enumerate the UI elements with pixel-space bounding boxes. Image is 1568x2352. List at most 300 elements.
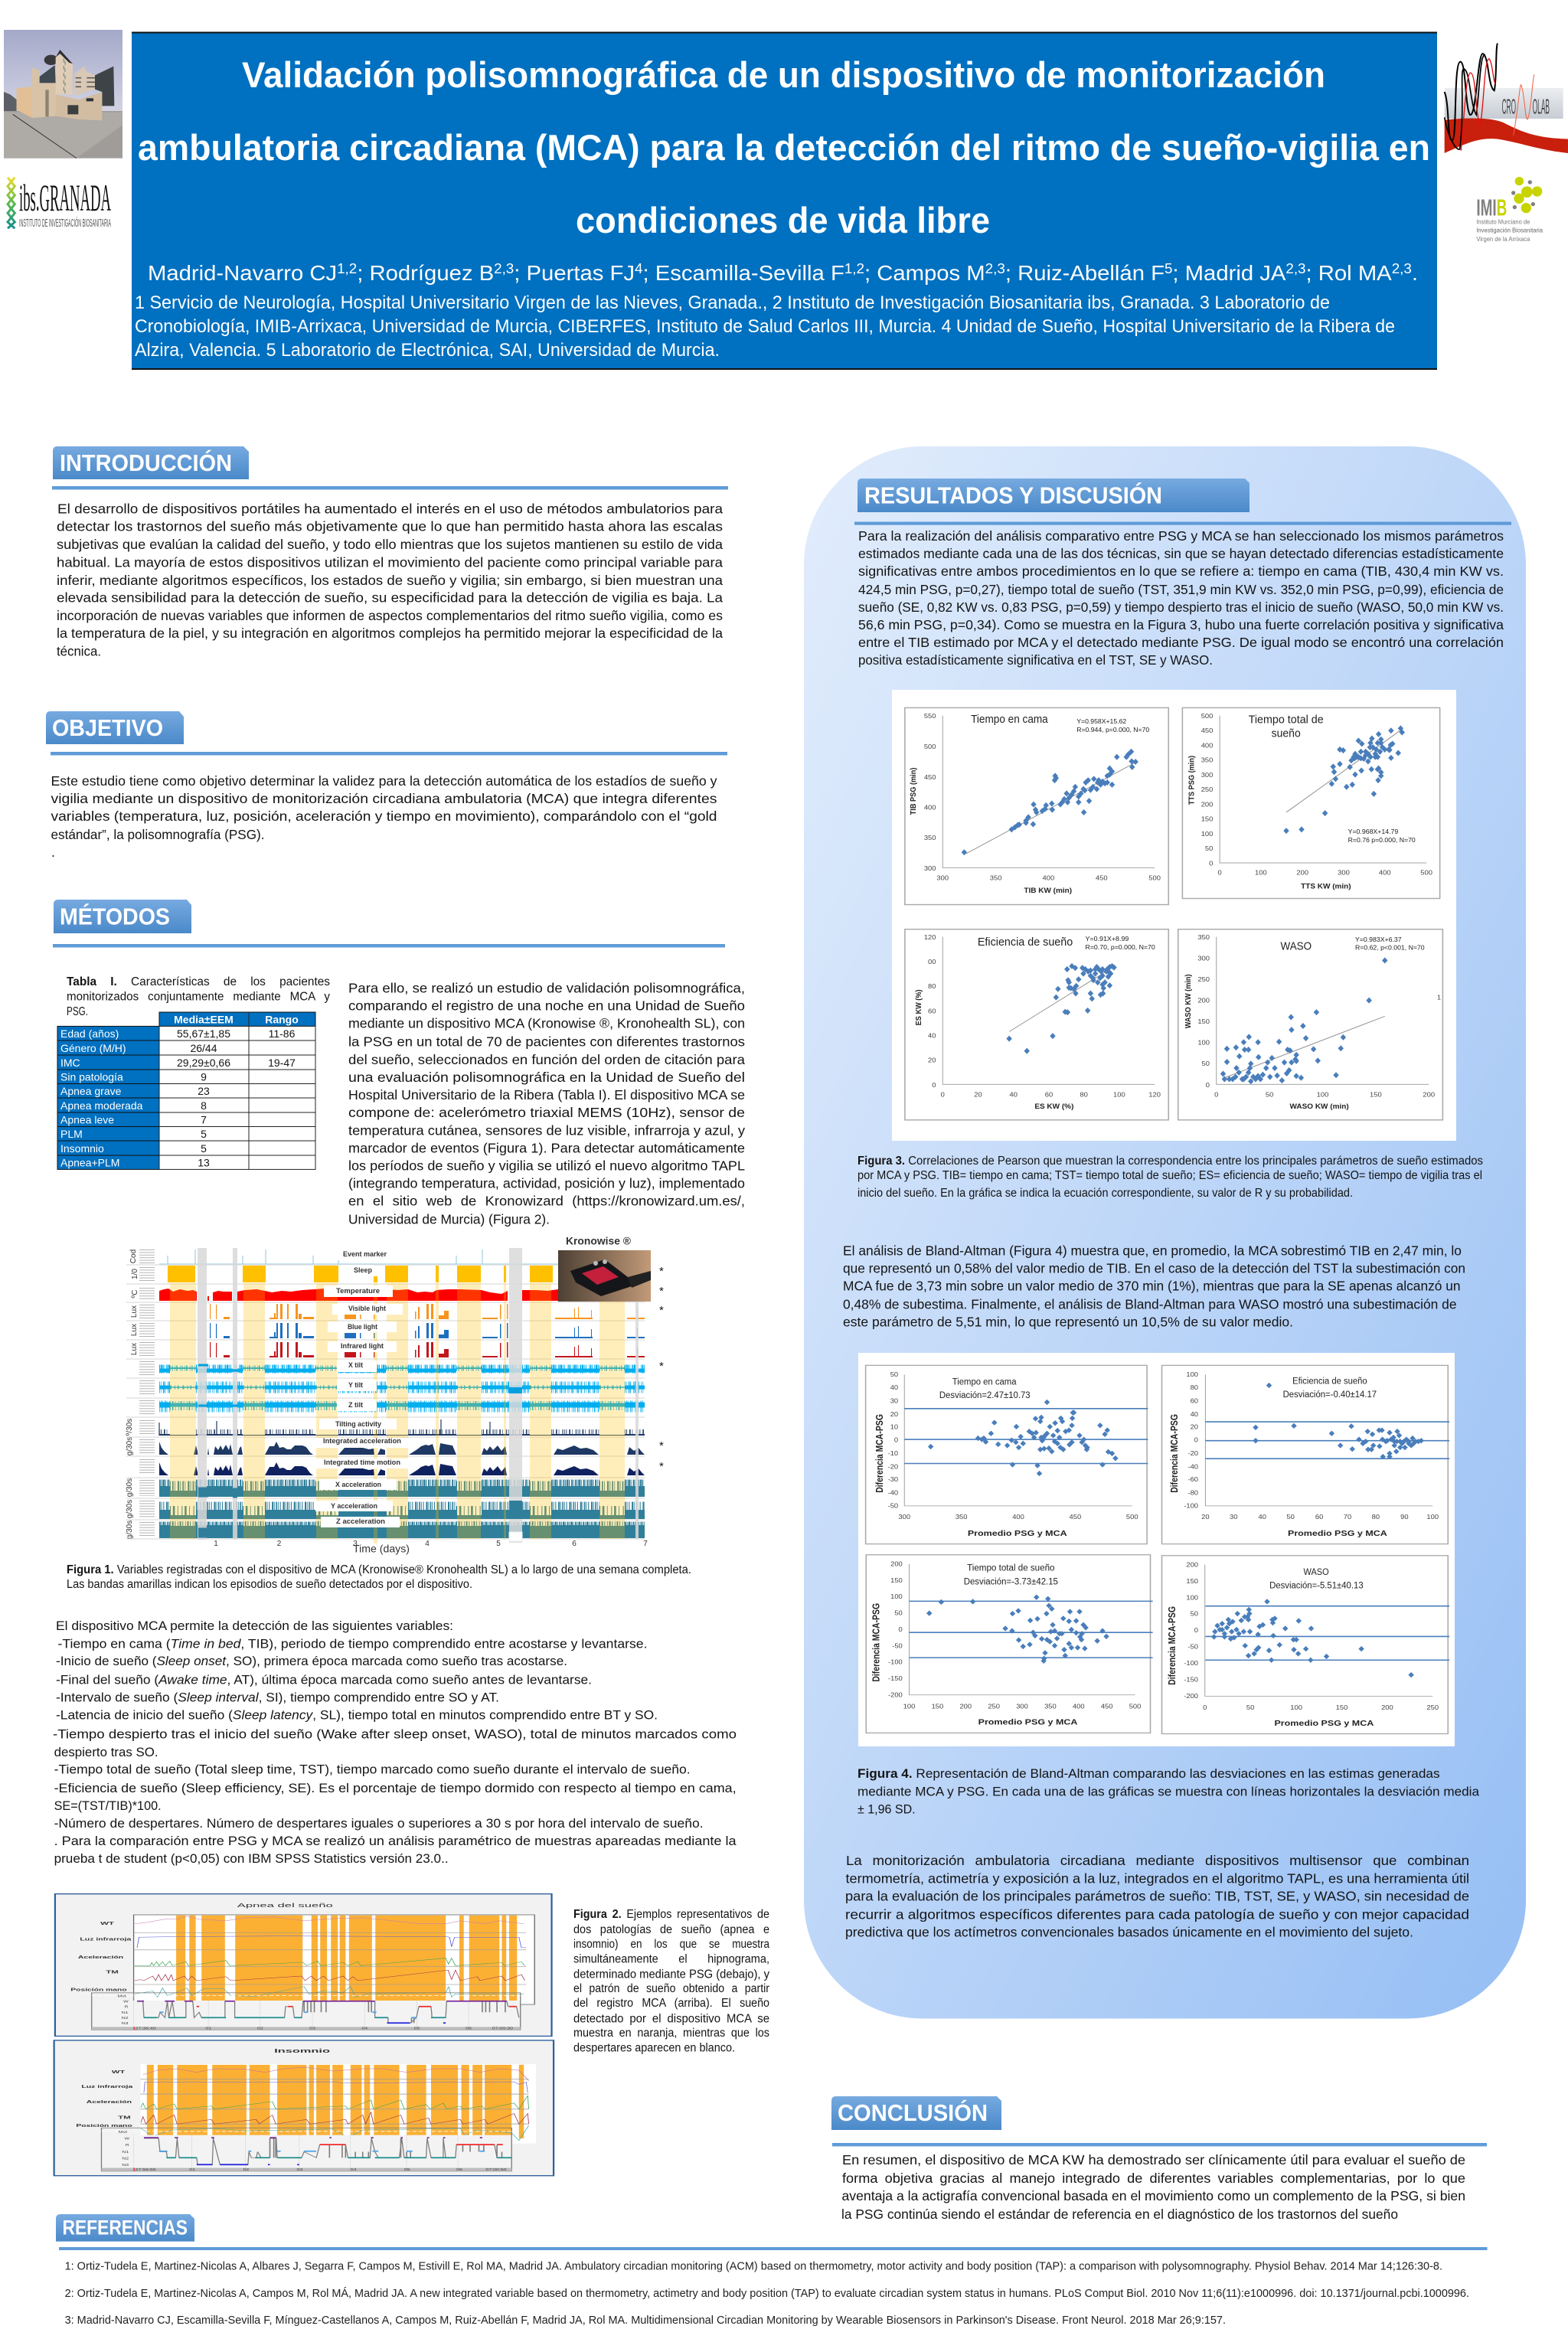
chart: WASO: 150 <box>1197 1018 1210 1025</box>
text: results paragraph: sueño (SE, 0,82 KW vs. 0,83 PSG, p=0,59) y tiempo despierto tras el inicio de sueño (WASO, 50,0 min KW vs. <box>858 599 1504 615</box>
text: objetivo: vigilia mediante un dispositivo de monitorización circadiana ambulatoria (MCA) que integra diferentes <box>51 791 717 806</box>
figure 2 caption: el patrón de sueño obtenido a partir <box>573 1982 769 1995</box>
chart: eficiencia de sueño: Eficiencia de sueño <box>978 936 1073 949</box>
table: patient characteristics: Rango <box>265 1014 299 1026</box>
panel labels: N2 <box>122 2158 129 2161</box>
text: conclusión: aventaja a la actigrafía convencional basada en el movimiento como un complemento de la PSG, si bien <box>842 2188 1465 2203</box>
text: métodos study description: la PSG en un total de 70 de pacientes con diferentes trastornos <box>348 1034 745 1050</box>
panel labels: 02 <box>257 2027 263 2030</box>
chart: Bland-Altman eficiencia de sueño: 20 <box>1191 1423 1198 1430</box>
chart: tiempo en cama: 400 <box>1043 874 1054 881</box>
chart: tiempo en cama: 300 <box>936 874 949 881</box>
chart: WASO: WASO KW (min) <box>1184 974 1193 1028</box>
chart: eficiencia de sueño: 60 <box>928 1008 936 1014</box>
logo: IMIB <box>1476 177 1544 243</box>
row: axis units: ºC <box>131 1290 139 1298</box>
heading: referencias: REFERENCIAS <box>63 2216 188 2239</box>
authors: 4 <box>635 261 642 276</box>
panel labels: W <box>123 2000 129 2004</box>
panel labels: R <box>126 2144 129 2148</box>
heading: resultados y discusión: RESULTADOS Y DISCUSIÓN <box>864 481 1162 508</box>
authors: 5 <box>1165 261 1172 276</box>
chart: eficiencia de sueño: R=0.70, p=0.000, N=70 <box>1086 943 1155 951</box>
chart: tiempo total de sueño: 300 <box>1201 771 1213 779</box>
chart: Bland-Altman eficiencia de sueño: Promedio PSG y MCA <box>1288 1530 1388 1538</box>
row labels: Infrared light <box>341 1342 384 1350</box>
text: introducción <box>57 501 723 659</box>
chart: Bland-Altman eficiencia de sueño: 40 <box>1191 1411 1198 1418</box>
row: axis units: Lux <box>130 1324 139 1336</box>
text: variables list: -Eficiencia de sueño (Sleep efficiency, SE). Es el porcentaje de tiempo dormido con respecto al tiempo en cama, <box>54 1782 737 1795</box>
chart: Bland-Altman tiempo total de sueño: 450 <box>1101 1703 1113 1710</box>
chart: WASO: WASO KW (min) <box>1290 1102 1349 1111</box>
text: variables list: -Latencia de inicio del sueño ( Sleep latency , SL), tiempo total en minutos comprendido entre BT y SO. <box>56 1708 658 1722</box>
panel labels: N3 <box>122 2164 129 2167</box>
figure 3 caption: Figura 3. Correlaciones de Pearson que muestran la correspondencia entre los principales parámetros de sueño estimados <box>858 1155 1483 1168</box>
text: métodos study description: Hospital Universitario de la Ribera (Tabla I). El dispositivo MCA se <box>348 1087 745 1102</box>
chart: Bland-Altman tiempo total de sueño: 150 <box>890 1577 903 1584</box>
chart: tiempo total de sueño: Tiempo total de <box>1249 714 1324 726</box>
chart: tiempo en cama: 500 <box>1148 874 1161 881</box>
heading: métodos <box>53 900 725 948</box>
chart: Bland-Altman eficiencia de sueño: 90 <box>1400 1514 1409 1521</box>
heading: conclusión <box>831 2096 1487 2146</box>
chart: Bland-Altman WASO: WASO <box>1303 1567 1329 1577</box>
figure 4 caption: mediante MCA y PSG. En cada una de las gráficas se muestra con líneas horizontales la desviación media <box>858 1785 1480 1799</box>
text: results paragraph: estimados mediante cada una de las dos técnicas, sin que se hayan detectado diferencias estadísticamente <box>858 546 1504 561</box>
text: discussion paragraph: para la evaluación de los principales parámetros de sueño: TIB, TST, SE, y WASO, sin necesidad de <box>845 1888 1469 1903</box>
chart: tiempo total de sueño: 400 <box>1379 869 1391 876</box>
text: conclusión <box>841 2152 1465 2222</box>
chart: eficiencia de sueño: 120 <box>924 933 936 941</box>
figure 1 caption: Figura 1. Variables registradas con el dispositivo de MCA (Kronowise® Kronohealth SL) a lo largo de una semana completa. <box>67 1563 691 1576</box>
text: métodos study description: del sueño, seleccionados en función del orden de citación para <box>348 1052 745 1067</box>
text: results paragraph: entre el TIB estimado por MCA y el detectado mediante PSG. De igual modo se encontró una correlación <box>858 635 1504 650</box>
row: axis units: g/30s <box>126 1478 134 1497</box>
grey no-data bands <box>198 1248 639 1543</box>
text: variables list: -Número de despertares. Número de despertares iguales o superiores a 30 s por hora del intervalo de sueño. <box>54 1817 704 1831</box>
header banner <box>132 32 1437 369</box>
chart: eficiencia de sueño: 0 <box>932 1081 936 1089</box>
text: métodos study description: comparando el registro de una noche en una Unidad de Sueño <box>348 998 745 1014</box>
panel labels: 04 <box>351 2168 357 2172</box>
affiliations <box>135 292 1395 361</box>
chart: Bland-Altman WASO: 150 <box>1186 1578 1198 1585</box>
text: introducción: subjetivas que evalúan la calidad del sueño, y todo ello mientras que los sujetos mantienen su estilo de vida <box>57 537 723 552</box>
section: métodos <box>53 900 745 1227</box>
chart: Bland-Altman tiempo en cama: 500 <box>1126 1514 1138 1521</box>
chart: Bland-Altman tiempo en cama: 350 <box>956 1514 968 1521</box>
chart: Bland-Altman WASO: -150 <box>1184 1676 1198 1683</box>
chart: Bland-Altman tiempo total de sueño: Desviación=-3.73±42.15 <box>964 1576 1058 1586</box>
figure 1 caption <box>67 1563 691 1591</box>
panel labels: 04 <box>361 2027 368 2030</box>
panel: apnea del sueño <box>55 1894 552 2036</box>
panel labels: N1 <box>122 2011 129 2014</box>
significance asterisks: * <box>659 1439 664 1452</box>
panel labels: 01 <box>189 2168 195 2172</box>
chart: Bland-Altman tiempo total de sueño: 50 <box>894 1609 903 1617</box>
chart: Bland-Altman tiempo total de sueño <box>866 1555 1153 1733</box>
panel labels: Posición mano <box>70 1987 127 1992</box>
chart: tiempo total de sueño: 50 <box>1205 844 1213 852</box>
figure 2 caption: determinado mediante PSG (debajo), y <box>573 1968 769 1981</box>
authors: 2,3 <box>985 261 1005 276</box>
row labels: X tilt <box>348 1361 363 1369</box>
chart: Bland-Altman eficiencia de sueño: 100 <box>1426 1514 1439 1521</box>
chart: Bland-Altman eficiencia de sueño: 40 <box>1259 1514 1266 1521</box>
chart: Bland-Altman eficiencia de sueño <box>1162 1365 1449 1544</box>
chart: tiempo en cama: 400 <box>924 804 936 811</box>
authors: 2,3 <box>1285 261 1306 276</box>
text: introducción: habitual. La mayoría de estos dispositivos utilizan el movimiento del paciente como principal variable para <box>57 554 723 570</box>
text: Bland-Altman paragraph <box>843 1243 1465 1330</box>
chart: Bland-Altman tiempo total de sueño: 100 <box>903 1703 916 1710</box>
table: patient characteristics: 7 <box>201 1113 207 1125</box>
sleep episodes <box>168 1266 553 1282</box>
chart: eficiencia de sueño: Y=0.91X+8.99 <box>1086 936 1129 942</box>
chart: tiempo total de sueño: 400 <box>1201 742 1213 750</box>
chart: Bland-Altman eficiencia de sueño: 30 <box>1230 1514 1238 1521</box>
table: patient characteristics: 9 <box>201 1070 207 1083</box>
panel labels <box>70 1921 513 2030</box>
row: axis units: g/30s <box>126 1521 134 1539</box>
row labels <box>306 1250 419 1527</box>
chart: Bland-Altman tiempo en cama <box>866 1365 1148 1544</box>
panel labels: N3 <box>122 2022 129 2025</box>
table: patient characteristics: 13 <box>198 1156 210 1168</box>
text: results paragraph: positiva estadísticamente significativa en el TST, SE y WASO. <box>858 652 1213 668</box>
table caption: Tabla I. Características de los pacientes <box>67 975 330 988</box>
text: métodos study description: Para ello, se realizó un estudio de validación polisomnográfica, <box>348 980 745 995</box>
text: variables list: -Inicio de sueño ( Sleep onset, SO), primera época marcada como sueño tras acostarse. <box>56 1655 567 1668</box>
chart: Bland-Altman tiempo en cama: Tiempo en cama <box>952 1377 1017 1387</box>
row labels: Integrated acceleration <box>323 1437 401 1445</box>
panel labels: 27:36:40 <box>135 2027 156 2030</box>
section: referencias <box>56 2214 1487 2327</box>
table: patient characteristics: 19-47 <box>268 1057 296 1069</box>
chart: WASO: Y=0.983X+6.37 <box>1355 936 1402 943</box>
panel: resultados y discusión <box>804 446 1526 2018</box>
table: patient characteristics: Insomnio <box>60 1142 104 1155</box>
title <box>138 54 1430 240</box>
figure 1 caption: Las bandas amarillas indican los episodios de sueño detectados por el dispositivo. <box>67 1578 472 1591</box>
title: condiciones de vida libre <box>576 200 990 240</box>
chart: eficiencia de sueño: 40 <box>1010 1091 1018 1098</box>
heading: introducción <box>52 446 728 490</box>
text: discussion paragraph <box>845 1853 1469 1939</box>
chart: tiempo total de sueño: 150 <box>1201 815 1213 822</box>
time axis: 3 <box>353 1540 358 1548</box>
row: Y acceleration <box>159 1506 645 1517</box>
row labels: Z acceleration <box>336 1517 385 1525</box>
chart: tiempo total de sueño: TTS PSG (min) <box>1187 756 1196 805</box>
text: objetivo <box>51 773 717 860</box>
chart: Bland-Altman eficiencia de sueño: Diferencia MCA-PSG <box>1170 1414 1180 1493</box>
text: Bland-Altman paragraph: 0,48% de subestima. Finalmente, el análisis de Bland-Altman para WASO mostró una subestimación de <box>843 1297 1456 1312</box>
chart: Bland-Altman WASO: Desviación=-5.51±40.13 <box>1269 1581 1364 1590</box>
chart: tiempo en cama <box>905 707 1168 905</box>
chart: Bland-Altman tiempo en cama: Promedio PSG y MCA <box>968 1530 1067 1538</box>
text: results paragraph <box>858 528 1504 668</box>
text: objetivo: Este estudio tiene como objetivo determinar la validez para la detección automática de los estadíos de sueño y <box>51 773 717 789</box>
text: métodos study description: compone de: acelerómetro triaxial MEMS (10Hz), sensor de <box>348 1105 745 1120</box>
panel labels: 02 <box>243 2168 249 2172</box>
reference list: 2: Ortiz-Tudela E, Martinez-Nicolas A, Campos M, Rol MÁ, Madrid JA. A new integrated variable based on thermometry, actimetry and body position (TAP) to evaluate circadian system status in humans. PLoS Comput Biol. 2010 Nov 11;6(11):e1000996. doi: 10.1371/journal.pcbi.1000996. <box>65 2287 1469 2300</box>
chart: Bland-Altman WASO: Promedio PSG y MCA <box>1274 1720 1374 1728</box>
row: integrated time motion <box>159 1462 645 1475</box>
chart: WASO: 350 <box>1197 933 1210 941</box>
chart: tiempo total de sueño: 250 <box>1201 786 1213 793</box>
section: introducción <box>52 446 728 659</box>
table: patient characteristics: Sin patología <box>60 1070 123 1083</box>
authors: ; Rol MA <box>1306 261 1392 285</box>
text: results paragraph: Para la realización del análisis comparativo entre PSG y MCA se han seleccionado los mismos parámetros <box>858 528 1504 544</box>
chart: tiempo en cama: 450 <box>1096 874 1108 881</box>
row: axis ticks <box>139 1250 155 1537</box>
text: objetivo: estándar”, la polisomnografía (PSG). <box>51 827 265 842</box>
chart: Bland-Altman eficiencia de sueño: -100 <box>1184 1502 1198 1509</box>
text: variables list <box>53 1619 737 1866</box>
row: X acceleration <box>159 1483 645 1494</box>
authors: 1,2 <box>337 261 357 276</box>
table: patient characteristics: Apnea grave <box>60 1085 122 1097</box>
text: results paragraph: 424,5 min PSG, p=0,27), tiempo total de sueño (TST, 351,9 min KW vs. 352,0 min PSG, p=0,99), eficiencia de <box>858 582 1504 597</box>
chart: Bland-Altman WASO: 250 <box>1426 1704 1439 1711</box>
panel labels: W <box>124 2138 130 2141</box>
chart: tiempo total de sueño: 450 <box>1201 727 1213 734</box>
table: patient characteristics: Apnea moderada <box>60 1099 143 1112</box>
text: métodos study description: marcador de eventos (Figura 1). Para detectar automáticamente <box>348 1141 745 1156</box>
text: métodos study description: Universidad de Murcia) (Figura 2). <box>348 1212 550 1227</box>
logo: ibs.GRANADA <box>8 176 111 230</box>
panel labels <box>76 2069 507 2172</box>
chart: Bland-Altman tiempo total de sueño: -200 <box>888 1691 903 1698</box>
authors: ; Madrid JA <box>1172 261 1286 285</box>
text: results paragraph: 56,6 min PSG, p=0,34). Como se muestra en la Figura 3, hubo una fuerte correlación positiva y significativa <box>858 617 1504 632</box>
row: axis units: g/30s <box>126 1500 134 1518</box>
row labels: Integrated time motion <box>324 1459 400 1466</box>
chart: Bland-Altman WASO: -50 <box>1187 1643 1198 1650</box>
panel: insomnio <box>54 2040 554 2176</box>
table: patient characteristics: 8 <box>201 1099 207 1112</box>
text: conclusión: la PSG continúa siendo el estándar de referencia en el diagnóstico de los trastornos del sueño <box>841 2207 1398 2222</box>
flat recordings in grey bands <box>198 1365 237 1406</box>
row: visible light <box>210 1304 645 1319</box>
text: variables list: -Tiempo total de sueño (Total sleep time, TST), tiempo marcado como sueño durante el intervalo de sueño. <box>54 1763 691 1777</box>
row: temperature <box>159 1289 558 1301</box>
table: patient characteristics: PLM <box>60 1128 83 1140</box>
chart: tiempo en cama: TIB PSG (min) <box>910 768 918 815</box>
chart: Bland-Altman tiempo total de sueño: 500 <box>1129 1703 1142 1710</box>
time axis: 2 <box>277 1540 282 1548</box>
figure 2 caption: simultáneamente el hipnograma, <box>573 1952 769 1965</box>
chart: tiempo en cama: 450 <box>924 773 936 781</box>
chart: Bland-Altman tiempo total de sueño: 200 <box>959 1703 972 1710</box>
authors: Madrid-Navarro CJ <box>148 261 329 285</box>
chart: Bland-Altman WASO: 50 <box>1246 1704 1255 1711</box>
heading: referencias <box>56 2214 1487 2250</box>
logo: IMIB: Instituto Murciano de <box>1476 218 1530 225</box>
panel labels: Posición mano <box>76 2123 132 2128</box>
row: integrated acceleration <box>159 1442 645 1455</box>
text: variables list: -Tiempo en cama ( Time in bed , TIB), periodo de tiempo comprendido entre acostarse y levantarse. <box>58 1637 648 1651</box>
authors: 2,3 <box>1392 261 1412 276</box>
authors: . <box>1412 261 1418 285</box>
chart: tiempo en cama: 550 <box>924 713 936 720</box>
chart: Bland-Altman tiempo en cama: 0 <box>894 1436 898 1444</box>
chart: Bland-Altman tiempo en cama: -20 <box>888 1463 898 1470</box>
row labels: Visible light <box>348 1305 386 1312</box>
figure 2 caption: Figura 2. Ejemplos representativos de <box>573 1908 769 1921</box>
chart: Bland-Altman eficiencia de sueño: -80 <box>1187 1489 1198 1496</box>
chart: Bland-Altman eficiencia de sueño: 60 <box>1315 1514 1324 1521</box>
figure 4 caption: ± 1,96 SD. <box>858 1803 916 1817</box>
panel labels: 05 <box>414 2027 420 2030</box>
panel labels: N2 <box>122 2017 129 2020</box>
chart: eficiencia de sueño: 40 <box>928 1032 936 1039</box>
panel: apnea del sueño: Apnea del sueño <box>237 1903 333 1909</box>
chart: tiempo en cama: Tiempo en cama <box>971 713 1048 726</box>
chart: Bland-Altman tiempo en cama: 50 <box>890 1371 898 1378</box>
row: tilting activity <box>159 1419 645 1436</box>
row labels: Y acceleration <box>331 1502 377 1510</box>
time axis: 5 <box>496 1540 501 1548</box>
chart: Bland-Altman tiempo total de sueño: 150 <box>932 1703 943 1710</box>
panel labels: Luz infrarroja <box>81 2084 133 2089</box>
chart: tiempo total de sueño: 0 <box>1209 860 1213 867</box>
chart: Bland-Altman WASO: 200 <box>1381 1704 1393 1711</box>
figure 2 caption: muestra en naranja, mientras que los <box>573 2027 769 2040</box>
panel labels: Luz infrarroja <box>80 1936 132 1942</box>
chart: tiempo total de sueño: sueño <box>1272 727 1301 740</box>
chart: WASO: R=0.62, p<0.001, N=70 <box>1355 944 1425 952</box>
panel labels: 07:00:30 <box>492 2027 513 2030</box>
text: introducción: incorporación de nuevas variables que informen de aspectos complementarios del ritmo sueño vigilia, como es <box>57 608 723 623</box>
text: introducción: la temperatura de la piel, y su integración en algoritmos complejos ha permitido mejorar la especificidad de la <box>57 626 723 641</box>
panel labels: 05 <box>404 2168 410 2172</box>
chart: eficiencia de sueño: 120 <box>1148 1091 1161 1098</box>
chart: eficiencia de sueño: 20 <box>928 1057 936 1064</box>
table caption: PSG. <box>67 1005 88 1018</box>
panel labels: WT <box>100 1921 114 1926</box>
text: variables list: SE=(TST/TIB)*100. <box>54 1799 162 1813</box>
chart: tiempo en cama: 350 <box>990 874 1001 881</box>
chart: tiempo total de sueño: 350 <box>1201 756 1213 763</box>
figure 4 caption <box>858 1767 1480 1817</box>
text: métodos study description: (integrando temperatura, actividad, posición y luz), implementado <box>348 1176 745 1191</box>
chart: Bland-Altman WASO: 50 <box>1191 1610 1198 1618</box>
time axis: 1 <box>214 1540 218 1548</box>
chart: tiempo en cama: TIB KW (min) <box>1024 887 1072 895</box>
panel labels: Aceleración <box>87 2099 132 2104</box>
chart: Bland-Altman WASO: 100 <box>1186 1594 1198 1601</box>
panel labels: N1 <box>122 2151 129 2154</box>
chart: Bland-Altman tiempo en cama: 300 <box>898 1514 910 1521</box>
chart: tiempo total de sueño <box>1182 707 1440 899</box>
text: introducción: elevada sensibilidad para la detección de sueño, su especificidad para la detección de vigilia es baja. La <box>57 590 723 605</box>
chart: WASO: 0 <box>1206 1081 1210 1089</box>
chart: eficiencia de sueño: ES KW (%) <box>915 989 923 1025</box>
chart: Bland-Altman tiempo total de sueño: -50 <box>892 1642 903 1649</box>
chart: WASO: 100 <box>1197 1039 1210 1047</box>
chart: tiempo en cama: 350 <box>924 835 936 841</box>
chart: Bland-Altman eficiencia de sueño: 100 <box>1186 1371 1198 1378</box>
logos: Cronolab and IMIB: CRO <box>1502 94 1516 118</box>
chart: Bland-Altman WASO <box>1162 1556 1449 1733</box>
chart: tiempo total de sueño: 100 <box>1255 869 1267 876</box>
chart: eficiencia de sueño <box>905 929 1168 1120</box>
poster: ibs.GRANADA <box>19 176 111 219</box>
chart: Bland-Altman tiempo total de sueño: -150 <box>888 1675 903 1682</box>
chart: Bland-Altman eficiencia de sueño: -60 <box>1187 1476 1198 1483</box>
chart: Bland-Altman tiempo en cama: 10 <box>890 1423 898 1430</box>
table: patient characteristics: 11-86 <box>269 1027 296 1040</box>
text: introducción: técnica. <box>57 644 101 659</box>
chart: WASO: 200 <box>1423 1091 1435 1098</box>
chart: tiempo en cama: 300 <box>924 864 936 872</box>
row: axis units <box>126 1250 139 1539</box>
reference list: 1: Ortiz-Tudela E, Martinez-Nicolas A, Albares J, Segarra F, Campos M, Estivill E, Rol MA, Madrid JA. Ambulatory circadian monitoring (ACM) based on thermometry, motor activity and body position (TAP): a comparison with polysomnography. Physiol Behav. 2014 Mar 14;126:30-8. <box>65 2260 1442 2273</box>
panel labels: 03 <box>309 2027 315 2030</box>
figure 2 caption: despertares aparecen en blanco. <box>573 2041 735 2054</box>
chart: tiempo total de sueño: Y=0.968X+14.79 <box>1348 828 1399 835</box>
row: X tilt <box>159 1368 645 1370</box>
reference list: 3: Madrid-Navarro CJ, Escamilla-Sevilla F, Mínguez-Castellanos A, Campos M, Ruiz-Abellán F, Madrid JA, Rol MA. Multidimensional Circadian Monitoring by Wearable Biosensors in Parkinson's Disease. Front Neurol. 2018 Mar 26;9:157. <box>65 2314 1226 2327</box>
chart: eficiencia de sueño: 80 <box>928 983 936 990</box>
chart: Bland-Altman tiempo total de sueño: 350 <box>1044 1703 1057 1710</box>
text: Bland-Altman paragraph: MCA fue de 3,73 min sobre un valor medio de 370 min (1%), mientras que para la SE apenas alcanzó un <box>843 1279 1461 1294</box>
table: patient characteristics: 5 <box>201 1128 207 1140</box>
chart: Bland-Altman WASO: 150 <box>1336 1704 1348 1711</box>
panel labels: R <box>124 2005 129 2009</box>
chart: Bland-Altman WASO: 0 <box>1194 1627 1198 1634</box>
chart: tiempo en cama: R=0.944, p=0.000, N=70 <box>1076 726 1150 733</box>
photo: Kronowise device: Kronowise ® <box>566 1235 632 1247</box>
panel labels: TM <box>106 1969 119 1975</box>
figure 2 caption: del registro MCA (arriba). El sueño <box>573 1997 769 2010</box>
chart: Bland-Altman WASO: -200 <box>1184 1693 1198 1700</box>
row labels: Tilting activity <box>335 1420 381 1428</box>
section: conclusión <box>831 2096 1487 2222</box>
table caption: monitorizados conjuntamente mediante MCA y <box>67 991 330 1003</box>
table: patient characteristics: Media±EEM <box>174 1014 234 1026</box>
chart: Bland-Altman eficiencia de sueño: Desviación=-0.40±14.17 <box>1283 1390 1377 1400</box>
chart: Bland-Altman tiempo en cama: -30 <box>888 1476 898 1483</box>
photo: Kronowise device <box>558 1235 651 1302</box>
chart: tiempo total de sueño: 200 <box>1201 801 1213 808</box>
row: axis units: 1/0 <box>131 1269 139 1279</box>
significance asterisks: * <box>659 1304 664 1317</box>
chart: eficiencia de sueño: 0 <box>941 1091 945 1098</box>
text: métodos study description: en el sitio web de Kronowizard (https://kronowizard.um.es/, <box>348 1194 745 1209</box>
text: Bland-Altman paragraph: El análisis de Bland-Altman (Figura 4) muestra que, en promedio, la MCA sobrestimó TIB en 2,47 min, lo <box>843 1243 1462 1259</box>
time axis: 7 <box>643 1540 648 1548</box>
row: separators <box>126 1265 645 1539</box>
chart: Bland-Altman WASO: 100 <box>1290 1704 1302 1711</box>
heading: introducción: INTRODUCCIÓN <box>60 449 232 476</box>
significance asterisks: * <box>659 1460 664 1473</box>
text: results paragraph: significativas entre ambos procedimientos en lo que se refiere a: tiempo en cama (TIB, 430,4 min KW vs. <box>858 564 1504 579</box>
chart: Bland-Altman tiempo en cama: 20 <box>890 1411 898 1418</box>
authors: ; Ruiz-Abellán F <box>1005 261 1165 285</box>
authors: 1,2 <box>844 261 864 276</box>
chart: Bland-Altman WASO: Diferencia MCA-PSG <box>1168 1606 1178 1685</box>
figure 2 caption: dos patologías de sueño (apnea e <box>573 1923 769 1936</box>
text: discussion paragraph: predictiva que los actímetros convencionales basados únicamente en el movimiento del sujeto. <box>845 1924 1413 1939</box>
row labels: Y tilt <box>348 1381 363 1389</box>
text: objetivo: . <box>51 844 55 860</box>
